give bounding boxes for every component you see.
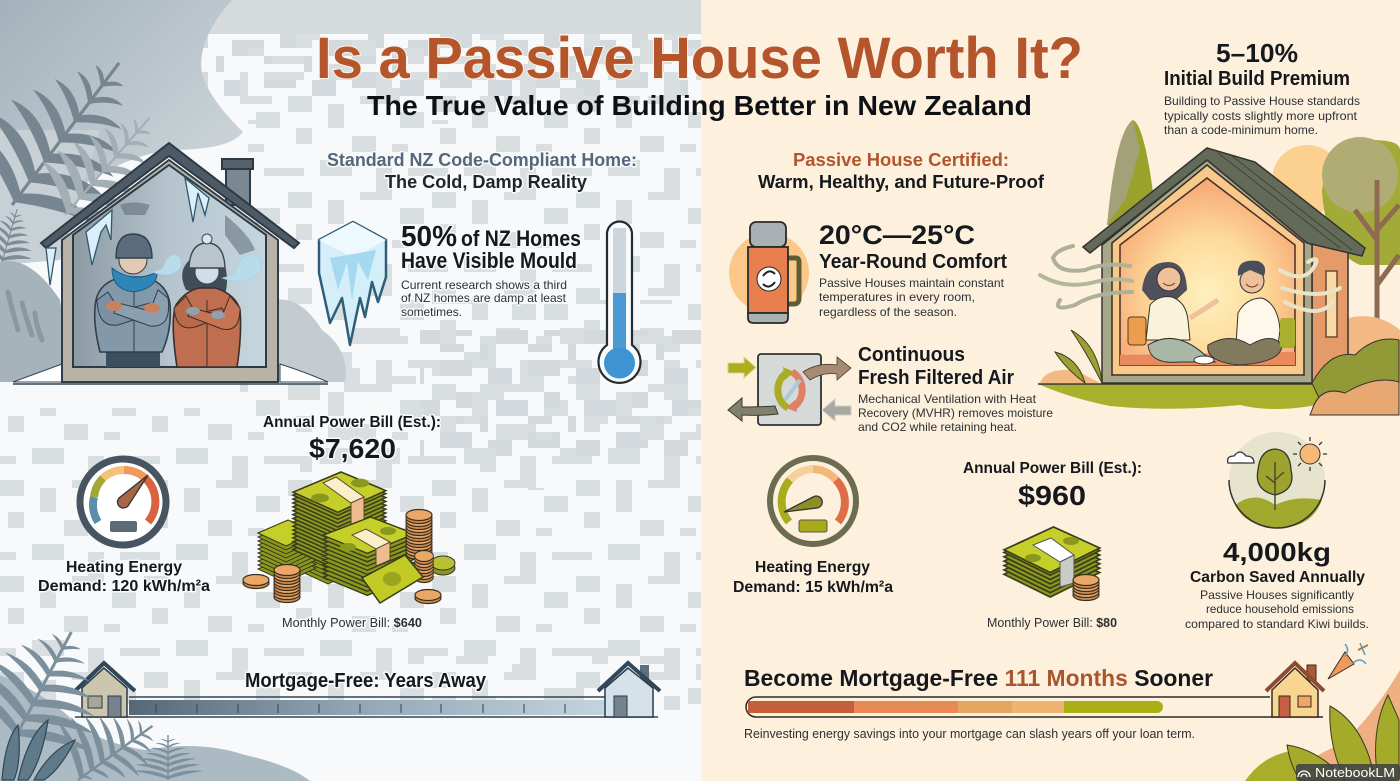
premium note <box>1164 38 1360 137</box>
cost: annual bill passive <box>963 460 1142 511</box>
background trees <box>1040 120 1400 383</box>
timeline: mortgage years away: Mortgage-Free: Years Away <box>245 670 487 692</box>
stat: carbon saved: Passive Houses significantly <box>1200 588 1354 602</box>
label: heating energy passive <box>733 559 893 596</box>
panel: standard home background <box>0 0 701 781</box>
cost: annual bill passive: Annual Power Bill (Est.): <box>963 460 1142 477</box>
premium note: typically costs slightly more upfront <box>1164 109 1358 123</box>
side wall <box>1312 235 1348 383</box>
icon: ice block <box>319 222 386 345</box>
stat: comfort: Passive Houses maintain constant <box>819 276 1005 290</box>
roof <box>41 143 299 248</box>
stat: fresh air: Continuous <box>858 344 965 366</box>
label: heating energy standard: Heating Energy <box>66 559 182 576</box>
icon: party popper <box>1328 643 1368 679</box>
chimney <box>222 159 253 205</box>
heading: standard home: The Cold, Damp Reality <box>385 172 587 192</box>
icon: thermometer <box>598 221 640 383</box>
label: heating energy standard: Demand: 120 kWh/m²a <box>38 578 210 595</box>
heading: standard home: Standard NZ Code-Compliant Home: <box>327 150 637 170</box>
illustration: warm house scene <box>1038 120 1400 415</box>
interior glow <box>1120 178 1295 365</box>
timeline: mortgage years away <box>75 663 660 717</box>
bushes <box>1312 339 1399 400</box>
icon: thermos <box>729 222 809 323</box>
premium note: Building to Passive House standards <box>1164 94 1360 108</box>
stat: carbon saved: 4,000kg <box>1223 537 1331 567</box>
ground line <box>1038 383 1312 385</box>
stat: comfort: Year-Round Comfort <box>819 251 1007 273</box>
label: monthly bill passive: Monthly Power Bill: $80 <box>987 616 1117 630</box>
label: heating energy passive: Demand: 15 kWh/m²a <box>733 579 893 596</box>
woman <box>173 234 241 367</box>
stat: carbon saved: compared to standard Kiwi builds. <box>1185 617 1369 631</box>
cost: annual bill standard <box>263 414 441 464</box>
icon: carbon saved tree <box>1228 432 1327 528</box>
premium note: Initial Build Premium <box>1164 68 1350 90</box>
icon: goal house <box>1266 663 1324 717</box>
progress bar: mortgage free sooner <box>744 643 1368 741</box>
watermark: NotebookLM <box>1296 764 1400 781</box>
stat: carbon saved <box>1185 537 1369 631</box>
stat: fresh air: Mechanical Ventilation with Heat <box>858 392 1037 406</box>
house: goal <box>598 663 660 717</box>
premium note: 5–10% <box>1216 38 1298 68</box>
illustration: ferns lower left <box>0 597 203 781</box>
walls <box>62 160 278 382</box>
stat: comfort: temperatures in every room, <box>819 290 975 304</box>
heading: standard home <box>327 150 637 192</box>
stat: fresh air: Fresh Filtered Air <box>858 367 1014 389</box>
label: monthly bill standard: Monthly Power Bill: $640 <box>282 616 422 630</box>
stat: comfort: 20°C—25°C <box>819 220 975 250</box>
stat: fresh air: and CO2 while retaining heat. <box>858 420 1017 434</box>
heading: passive house <box>758 150 1045 192</box>
snow ground <box>13 383 328 385</box>
stat: fresh air: Recovery (MVHR) removes moisture <box>858 406 1053 420</box>
air swirls <box>1040 246 1340 311</box>
heading: passive house: Warm, Healthy, and Future-Proof <box>758 172 1045 192</box>
panel: passive house background <box>701 0 1400 781</box>
icon: small money stack <box>1004 527 1100 600</box>
progress bar: mortgage free sooner: Become Mortgage-Free 111 Months Sooner <box>744 665 1213 691</box>
progress bar: mortgage free sooner: Reinvesting energy savings into your mortgage can slash years off your loan term. <box>744 727 1195 741</box>
title: Is a Passive House Worth It? <box>316 26 1083 91</box>
stat: fresh air <box>858 344 1053 434</box>
breath clouds <box>152 254 262 281</box>
icon: low heating gauge <box>770 458 856 544</box>
stat: carbon saved: Carbon Saved Annually <box>1190 569 1365 586</box>
stat: mould: of NZ Homes <box>461 226 581 251</box>
stat: mould: Current research shows a third <box>401 278 567 292</box>
cost: annual bill standard: $7,620 <box>309 433 396 464</box>
cost: annual bill standard: Annual Power Bill (Est.): <box>263 414 441 431</box>
stat: comfort <box>819 220 1007 319</box>
house: start <box>75 663 135 717</box>
stat: mould <box>401 221 581 319</box>
subtitle: The True Value of Building Better in New Zealand <box>367 90 1032 121</box>
stat: mould: of NZ homes are damp at least <box>401 291 567 305</box>
front wall <box>1102 160 1312 383</box>
roof <box>1083 148 1365 256</box>
illustration: foliage lower right <box>1245 670 1400 781</box>
label: heating energy standard <box>38 559 210 595</box>
stat: carbon saved: reduce household emissions <box>1206 602 1354 616</box>
interior <box>73 165 266 367</box>
watermark: NotebookLM: NotebookLM <box>1315 766 1395 780</box>
label: heating energy passive: Heating Energy <box>755 559 870 576</box>
cost: annual bill passive: $960 <box>1018 480 1086 511</box>
plant <box>1055 330 1102 383</box>
icon: high heating gauge <box>80 459 166 545</box>
icicles <box>46 178 209 285</box>
illustration: cold house <box>13 143 328 384</box>
man <box>95 234 170 367</box>
illustration: ferns upper left <box>0 15 189 340</box>
people <box>1128 261 1295 365</box>
icon: MVHR heat exchanger <box>728 354 851 425</box>
stat: mould: sometimes. <box>401 305 462 319</box>
icon: large money pile <box>243 472 455 604</box>
stat: comfort: regardless of the season. <box>819 305 957 319</box>
stat: mould: Have Visible Mould <box>401 248 577 273</box>
ground <box>1038 384 1350 409</box>
snow <box>13 364 328 382</box>
stat: mould: 50% <box>401 221 457 253</box>
heading: passive house: Passive House Certified: <box>793 150 1009 170</box>
premium note: than a code-minimum home. <box>1164 123 1318 137</box>
